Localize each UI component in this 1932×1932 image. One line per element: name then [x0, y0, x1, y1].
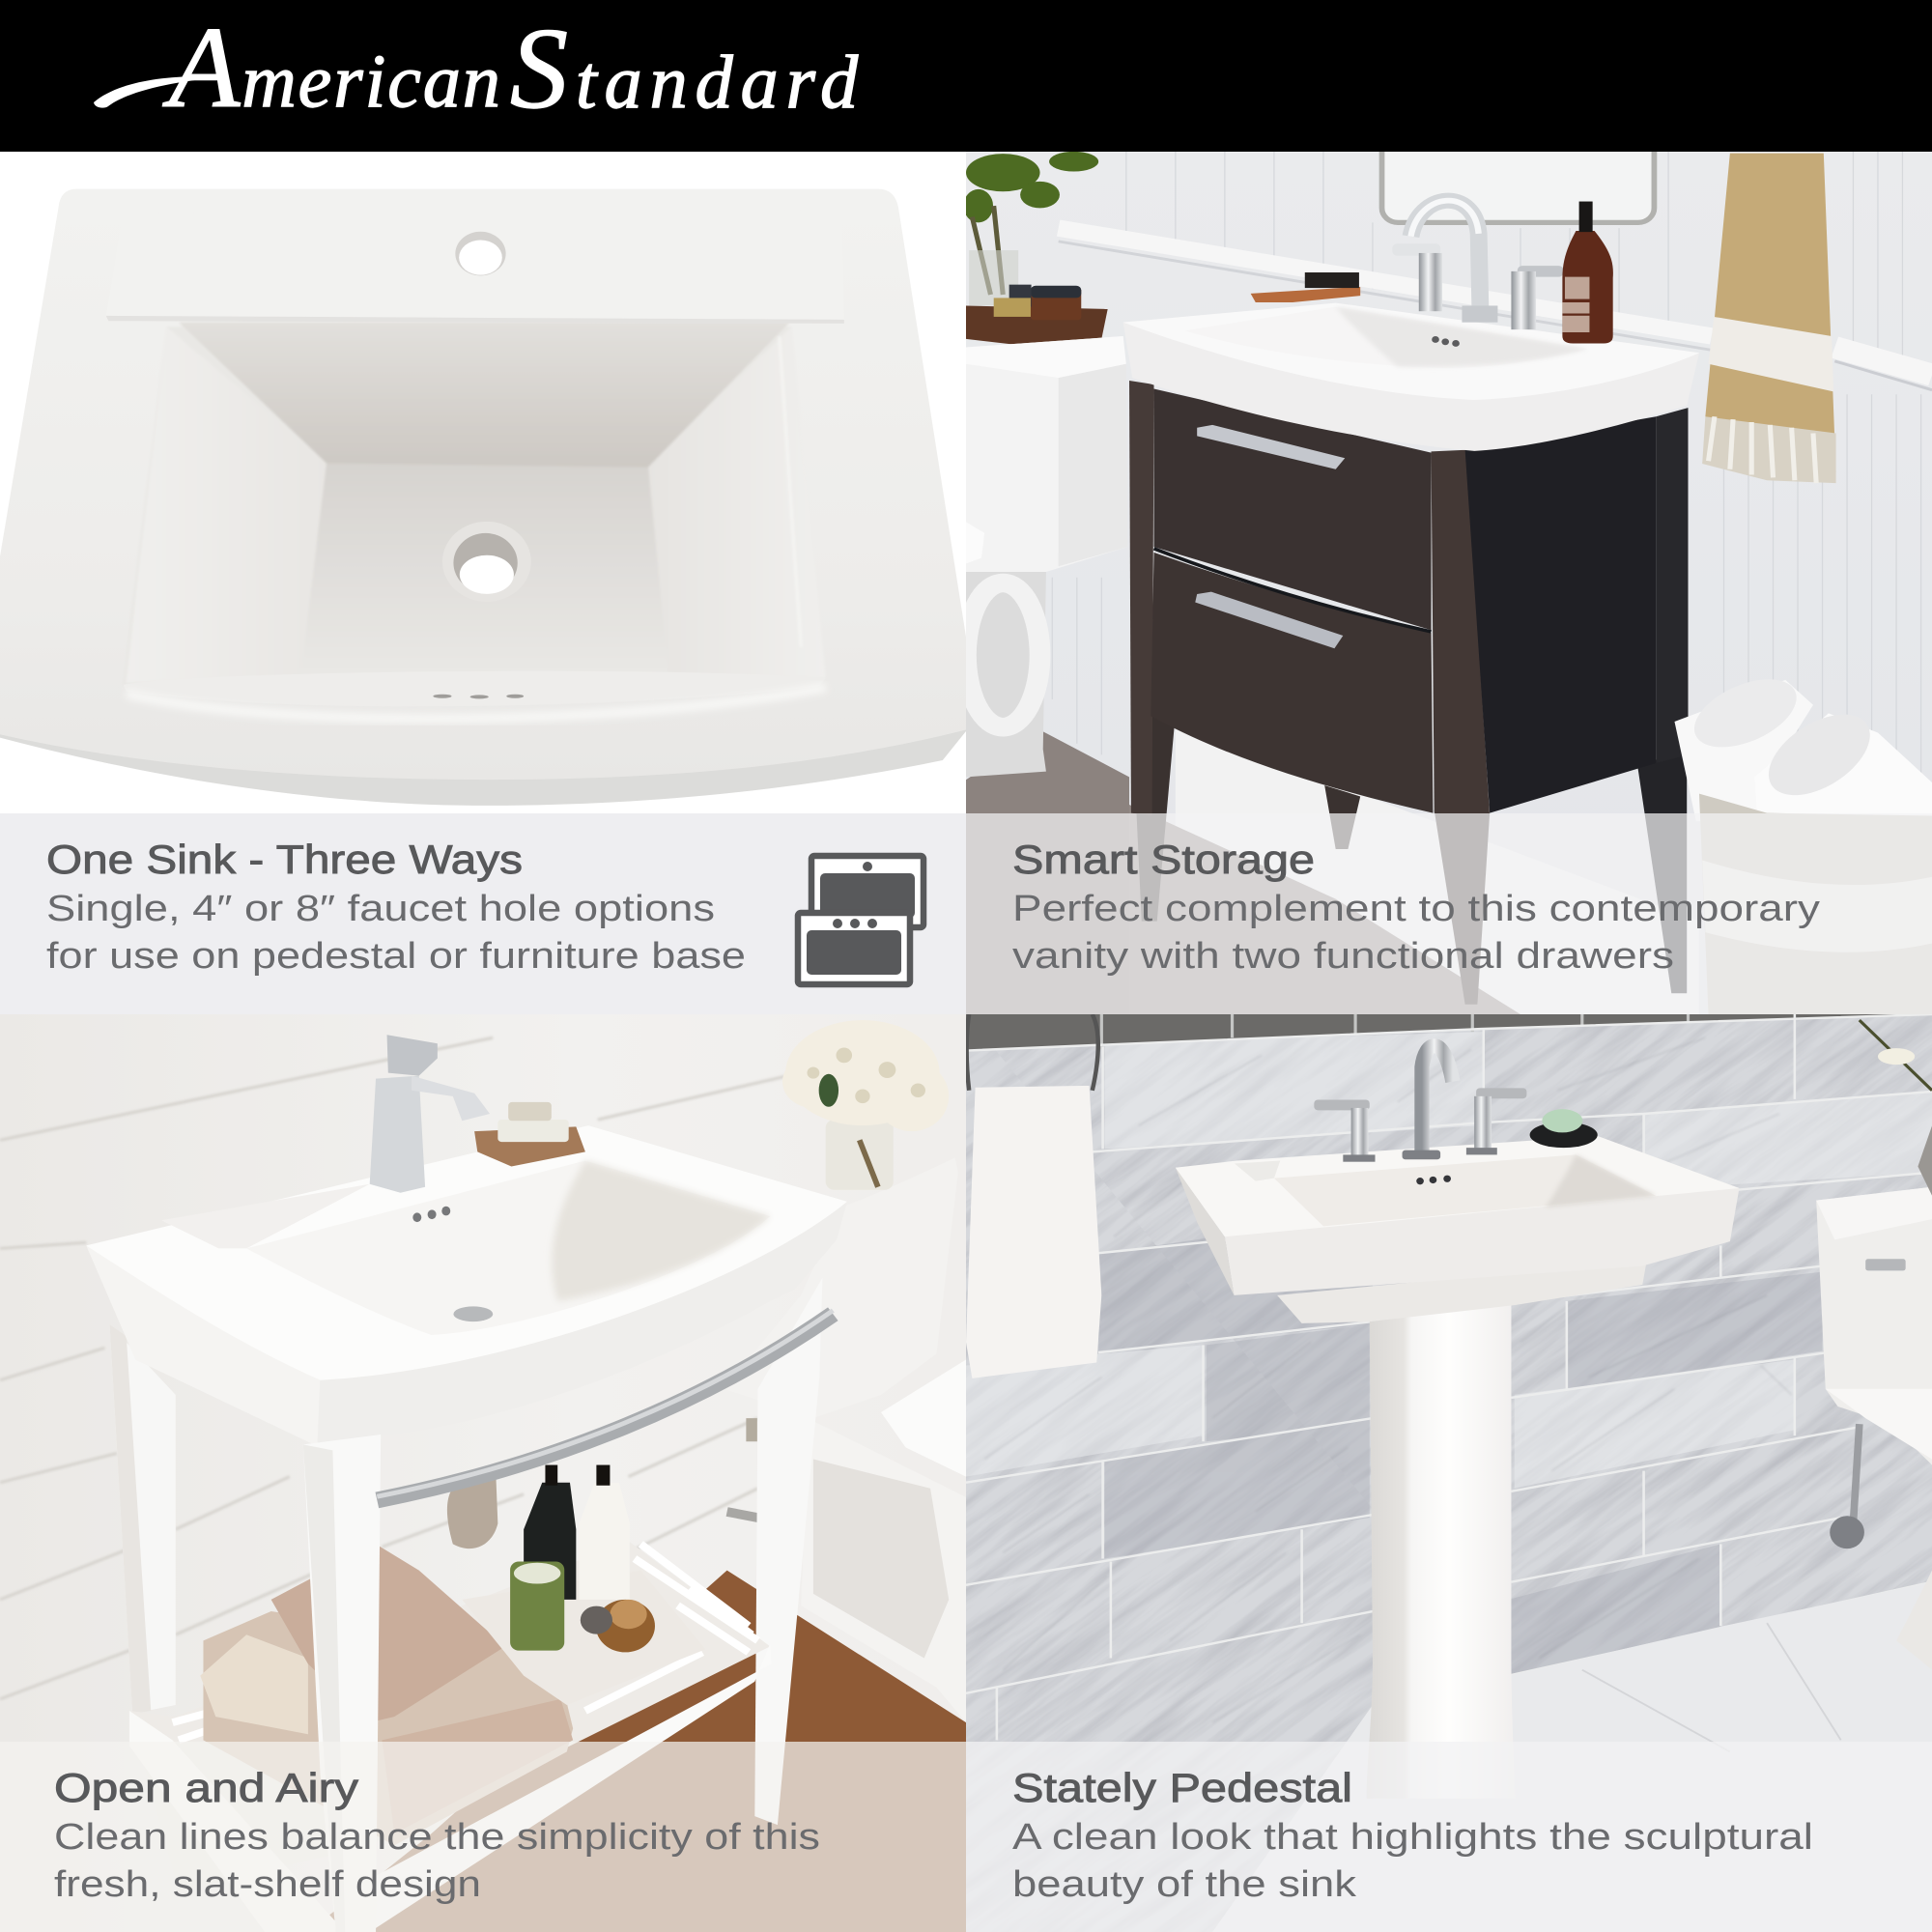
- caption: smart storage: vanity with two functional drawers: [1012, 936, 1674, 977]
- heading: Stately Pedestal: [1012, 1765, 1352, 1810]
- sink basin: [1176, 1136, 1739, 1295]
- faucet: [370, 1076, 425, 1193]
- panel: one sink three ways: [0, 151, 966, 817]
- caption: one sink three ways: for use on pedestal or furniture base: [46, 936, 746, 977]
- back legs and frame: [123, 1343, 176, 1710]
- icon: faucet hole options: [798, 856, 923, 984]
- caption: open and airy: fresh, slat-shelf design: [54, 1864, 481, 1905]
- soap bottle: [1562, 231, 1613, 343]
- photo: pedestal sink on marble wall: [966, 1014, 1932, 1932]
- basket: [1699, 794, 1932, 1014]
- photo: vanity with two drawers: [963, 134, 1932, 1014]
- caption: stately pedestal: beauty of the sink: [1012, 1864, 1357, 1905]
- rolled towels: [1674, 680, 1813, 821]
- sink: [86, 1125, 847, 1446]
- faucet: [1422, 1046, 1453, 1154]
- panel: stately pedestal: [966, 1014, 1932, 1932]
- grout lines: [966, 1014, 1932, 1740]
- marble tile tones: [1098, 1213, 1823, 1676]
- drawer pulls: [1197, 425, 1345, 469]
- faucet hole: [455, 232, 506, 275]
- body text: Perfect complement to this contemporary: [1012, 889, 1820, 929]
- drain: [445, 522, 528, 549]
- shelf: [568, 1548, 769, 1747]
- dark glass strip: [966, 1014, 1932, 1051]
- towel bar: [377, 1314, 833, 1500]
- body text: Clean lines balance the simplicity of this: [54, 1817, 820, 1858]
- logo: American Standard: American: [162, 3, 502, 131]
- faucet: [1410, 201, 1481, 317]
- pipe: [447, 1477, 497, 1548]
- floor: [966, 730, 1129, 1014]
- overflow holes: [433, 695, 524, 698]
- header bar: [0, 0, 1932, 152]
- toilet: [724, 1157, 958, 1418]
- heading: Smart Storage: [1012, 837, 1315, 882]
- soap dish: [1530, 1122, 1598, 1148]
- panel: open and airy: [0, 1014, 966, 1932]
- wood floor: [308, 1571, 966, 1932]
- caption: one sink three ways: [0, 813, 966, 1014]
- vase and branch: [1918, 1125, 1932, 1196]
- caption: smart storage: [966, 813, 1932, 1014]
- vanity legs: [1131, 699, 1360, 922]
- logo: American Standard: Standard: [510, 4, 866, 132]
- tray and jars: [966, 305, 1108, 344]
- logo: American Standard: [94, 3, 866, 132]
- towels: [203, 1611, 573, 1845]
- heading: One Sink - Three Ways: [46, 837, 523, 882]
- front leg: [303, 1435, 381, 1932]
- body text: Single, 4″ or 8″ faucet hole options: [46, 889, 715, 929]
- caption: open and airy: [0, 1742, 966, 1932]
- hanging towel: [1705, 154, 1836, 472]
- floor: [1212, 1582, 1932, 1932]
- bottles: [524, 1483, 576, 1600]
- pedestal skirt: [1277, 1260, 1647, 1323]
- plant: [963, 152, 1098, 222]
- photo: console sink with slat shelf: [0, 1014, 966, 1932]
- toilet: [966, 338, 1116, 572]
- pedestal column: [1367, 1304, 1516, 1799]
- photo: top view of white sink: [0, 151, 966, 817]
- vanity body: [1129, 381, 1154, 816]
- veins: [984, 1037, 1792, 1722]
- flowers and vase: [826, 1120, 894, 1190]
- soap tray: [474, 1126, 585, 1167]
- mirror: [1379, 152, 1658, 225]
- panel: smart storage: [963, 134, 1932, 1014]
- toilet: [1816, 1187, 1932, 1465]
- caption: stately pedestal: [966, 1742, 1932, 1932]
- chair rail: [1059, 228, 1712, 336]
- towel ring and towel: [967, 1014, 1098, 1091]
- brush: [1251, 287, 1360, 302]
- body text: A clean look that highlights the sculptural: [1012, 1817, 1813, 1858]
- sink: [1150, 384, 1639, 451]
- marble board: [463, 1596, 701, 1705]
- heading: Open and Airy: [54, 1765, 358, 1810]
